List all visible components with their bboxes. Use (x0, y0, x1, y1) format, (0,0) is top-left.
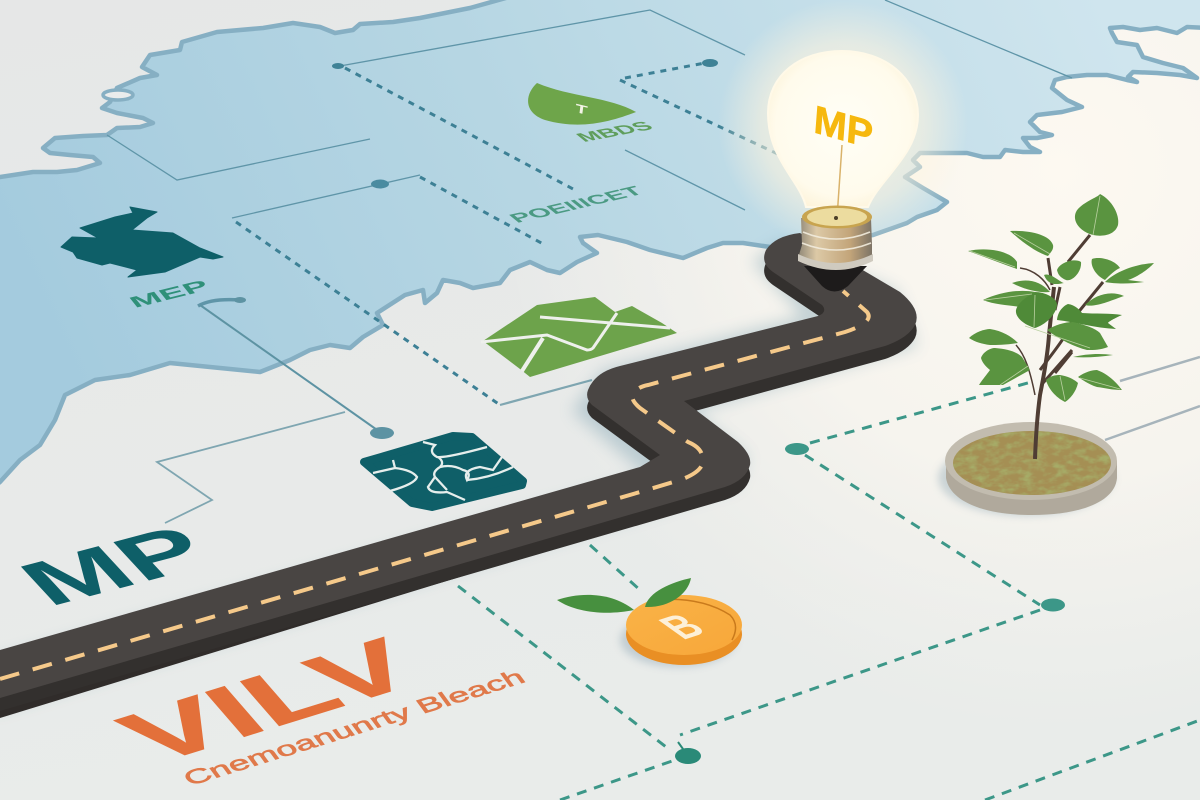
heading: MP: MP (2, 512, 227, 619)
icon: light bulb (768, 51, 918, 292)
label: MBDS: MBDS (572, 119, 658, 145)
pot (938, 422, 1117, 516)
leaf veins (970, 196, 1120, 400)
road shadow (0, 241, 917, 712)
leaves (968, 194, 1154, 402)
label: POEIIICET: POEIIICET (505, 183, 648, 225)
connector nodes (234, 59, 1065, 764)
label: MEP: MEP (125, 277, 214, 311)
icon: teal territory chip (364, 436, 523, 507)
icon: leaf with T (528, 83, 636, 125)
island in coast (103, 90, 133, 100)
road: winding path (0, 233, 917, 718)
road centre dashes (0, 291, 869, 679)
bulb glow (718, 0, 968, 250)
icon: orange coin with leaves (557, 578, 742, 667)
stem (1016, 235, 1103, 459)
icon: green envelope (481, 297, 677, 377)
icon: leaf with T: T (575, 101, 588, 118)
subheading: Cnemoanunrty Bleach: Cnemoanunrty Bleach (178, 666, 530, 791)
icon: plant in round pot (938, 194, 1154, 516)
coin symbol: B (649, 608, 717, 647)
bulb label MP: MP (812, 98, 874, 157)
panel: blue water region (0, 0, 1200, 490)
connector lines: dashed blue (236, 63, 780, 405)
icon: state map silhouette (61, 207, 223, 277)
heading: VILV: VILV (102, 623, 435, 779)
connector lines: thin solid (107, 0, 1200, 523)
coin leaves (557, 578, 691, 613)
connector lines: dashed green (458, 381, 1200, 800)
